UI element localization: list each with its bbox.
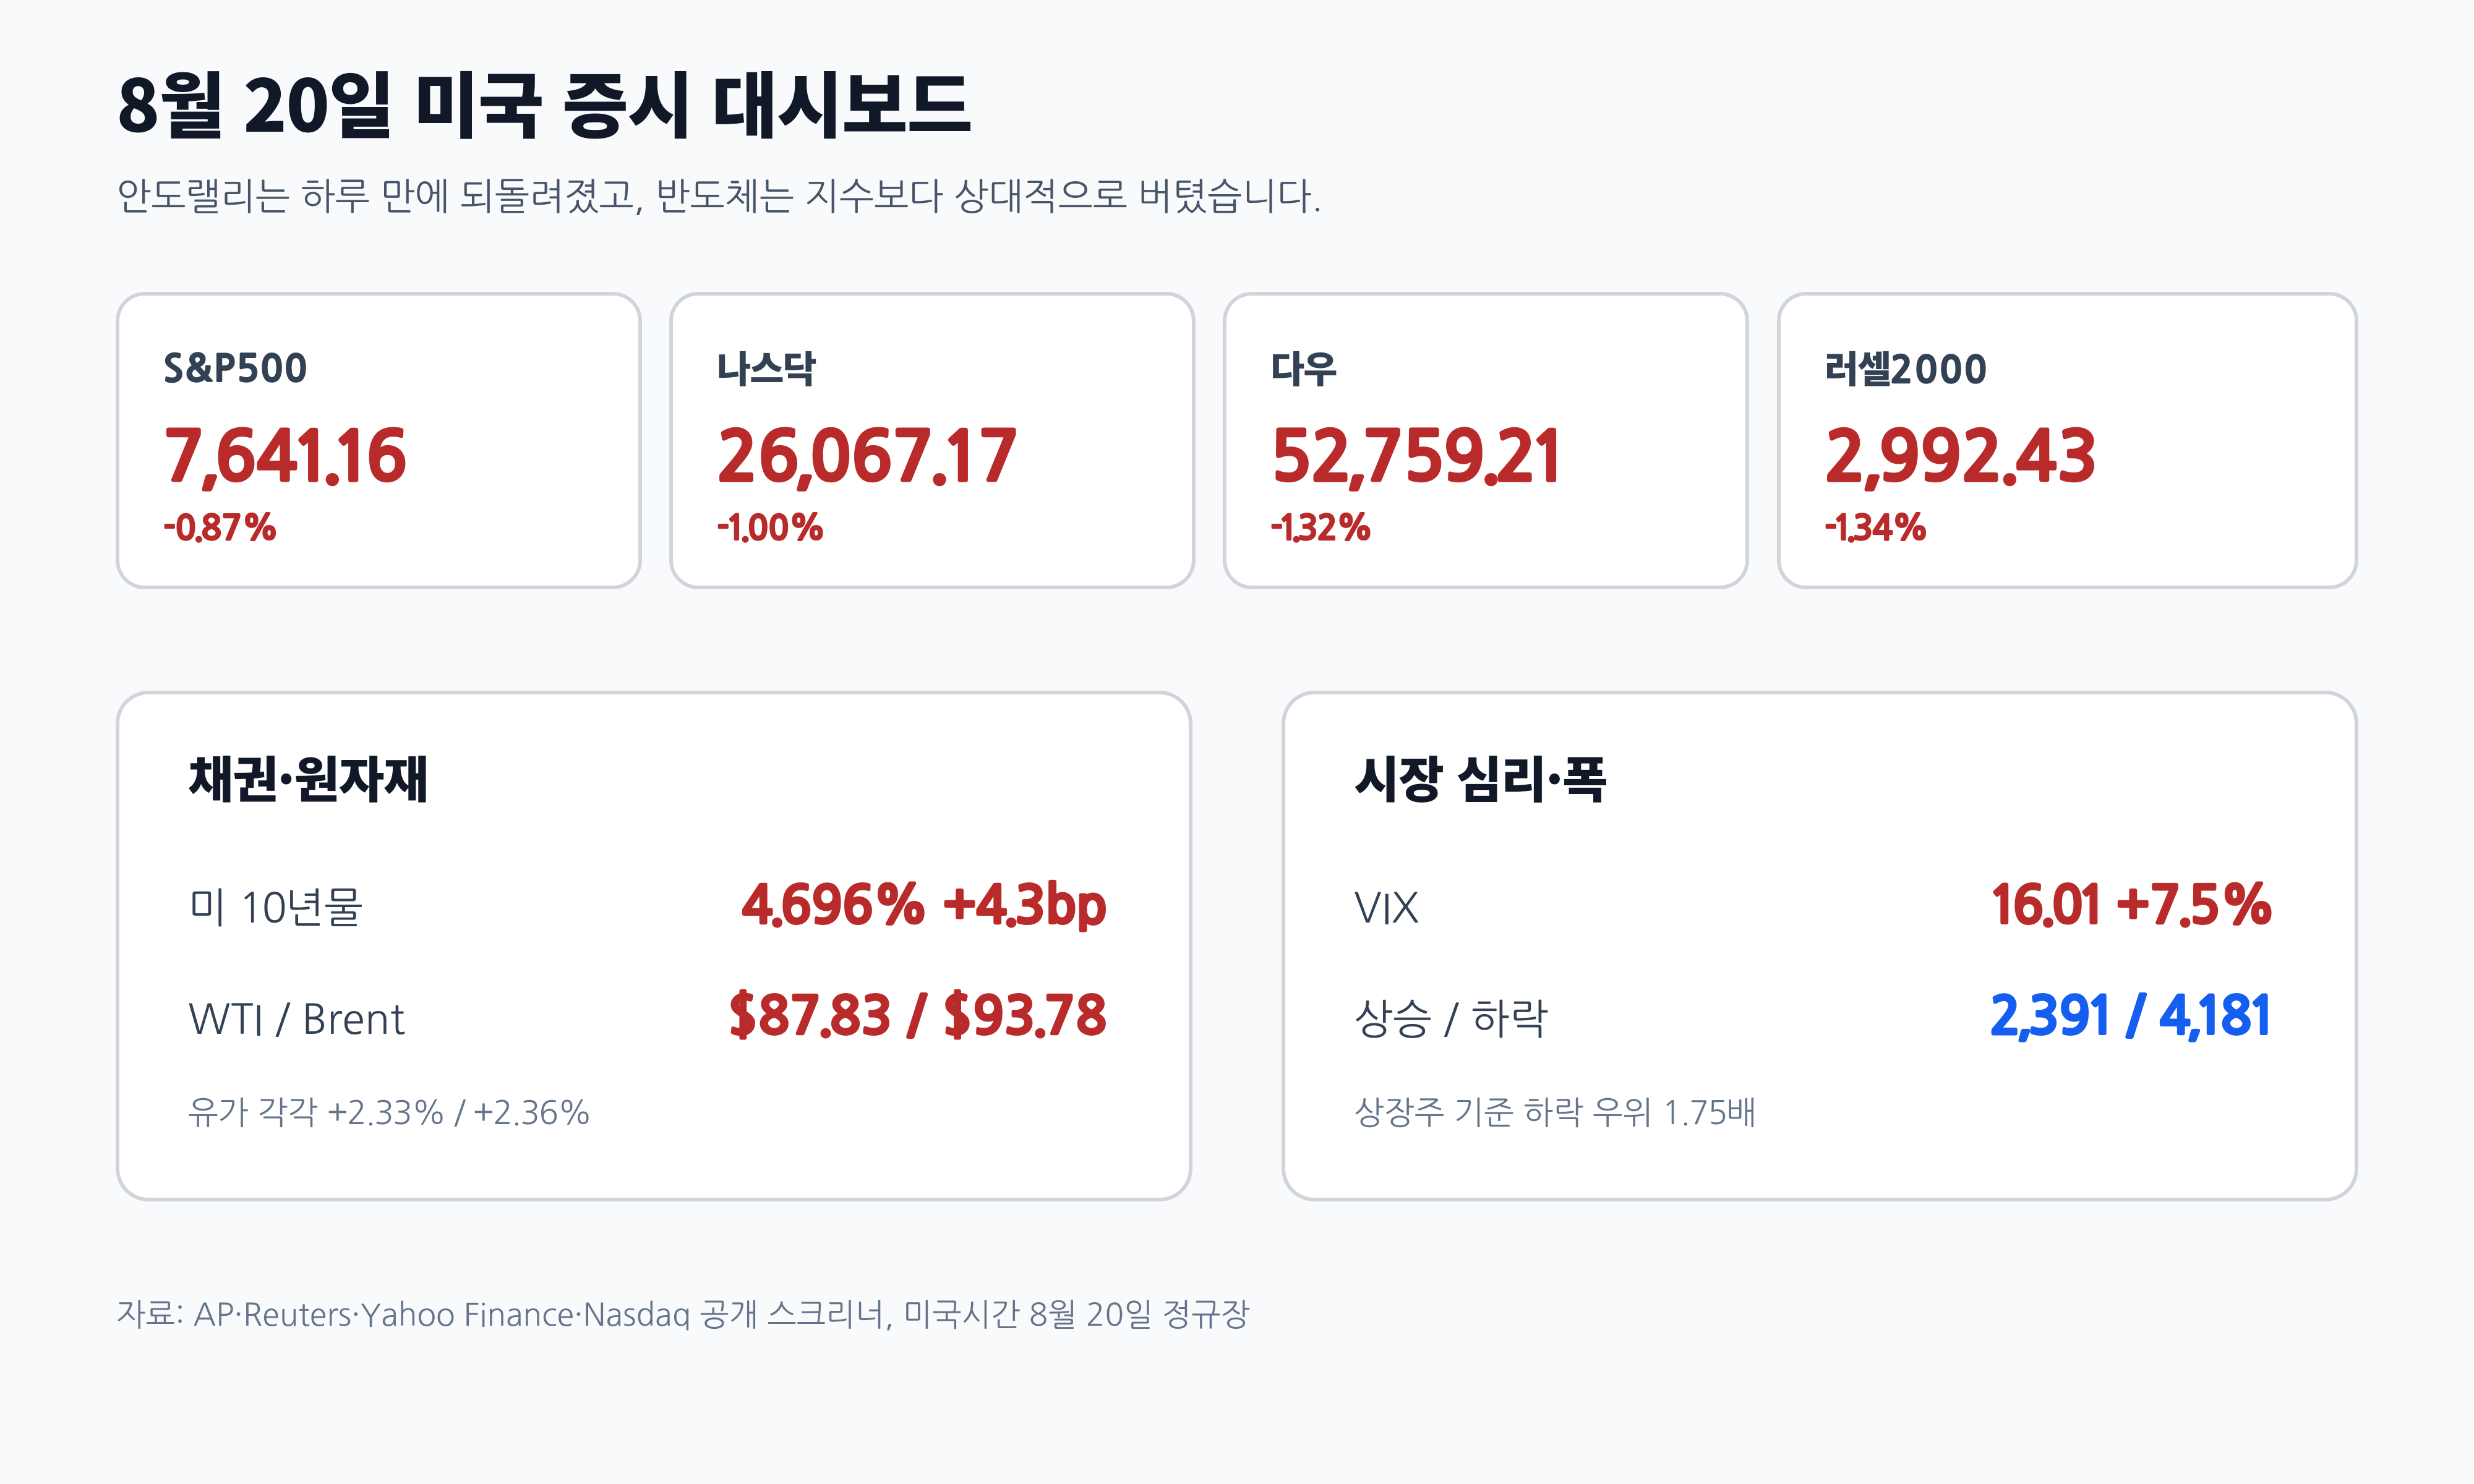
S&P500 change: -0.87% bbox=[163, 512, 279, 545]
Dow label: 다우 bbox=[1270, 340, 1337, 394]
Russell label: 러셀2000 bbox=[1825, 340, 1989, 394]
row: VIX label: VIX bbox=[1354, 887, 1419, 929]
panel: sentiment and breadth bbox=[1283, 693, 2356, 1200]
S&P500 label: S&P500 bbox=[163, 351, 309, 387]
source footnote: 자료: AP·Reuters·Yahoo Finance·Nasdaq 공개 스크리너, 미국시간 8월 20일 정규장 bbox=[116, 1300, 1250, 1331]
panel: Nasdaq card bbox=[671, 294, 1194, 587]
row: advance/decline label: 상승 / 하락 bbox=[1354, 999, 1549, 1040]
Russell value: 2,992.43 bbox=[1825, 424, 2099, 491]
row: VIX value: 16.01 +7.5% bbox=[1988, 881, 2276, 931]
Nasdaq value: 26,067.17 bbox=[717, 424, 1019, 491]
Russell change: -1.34% bbox=[1825, 512, 1928, 545]
breadth note: 상장주 기준 하락 우위 1.75배 bbox=[1354, 1097, 1757, 1129]
oil note: 유가 각각 +2.33% / +2.36% bbox=[188, 1097, 592, 1129]
panel: S&P500 card bbox=[118, 294, 640, 587]
Dow change: -1.32% bbox=[1270, 512, 1372, 545]
row: oil label: WTI / Brent bbox=[188, 999, 405, 1040]
title: 8월 20일 미국 증시 대시보드 bbox=[116, 49, 972, 153]
Nasdaq label: 나스닥 bbox=[717, 340, 816, 394]
row: advance/decline value: 2,391 / 4,181 bbox=[1990, 991, 2278, 1042]
subtitle: 안도랠리는 하루 만에 되돌려졌고, 반도체는 지수보다 상대적으로 버텼습니다. bbox=[116, 178, 1323, 215]
panel heading: 시장 심리·폭 bbox=[1354, 741, 1607, 812]
Dow value: 52,759.21 bbox=[1270, 424, 1570, 491]
panel: Russell 2000 card bbox=[1779, 294, 2356, 587]
S&P500 value: 7,641.16 bbox=[163, 424, 408, 491]
panel: Dow card bbox=[1225, 294, 1747, 587]
panel: bonds and commodities bbox=[118, 693, 1191, 1200]
Nasdaq change: -1.00% bbox=[717, 512, 826, 545]
row: US 10-year label: 미 10년물 bbox=[188, 887, 363, 929]
row: oil value: $87.83 / $93.78 bbox=[727, 991, 1107, 1042]
panel heading: 채권·원자재 bbox=[188, 741, 428, 812]
row: US 10-year value: 4.696% +4.3bp bbox=[742, 881, 1107, 931]
